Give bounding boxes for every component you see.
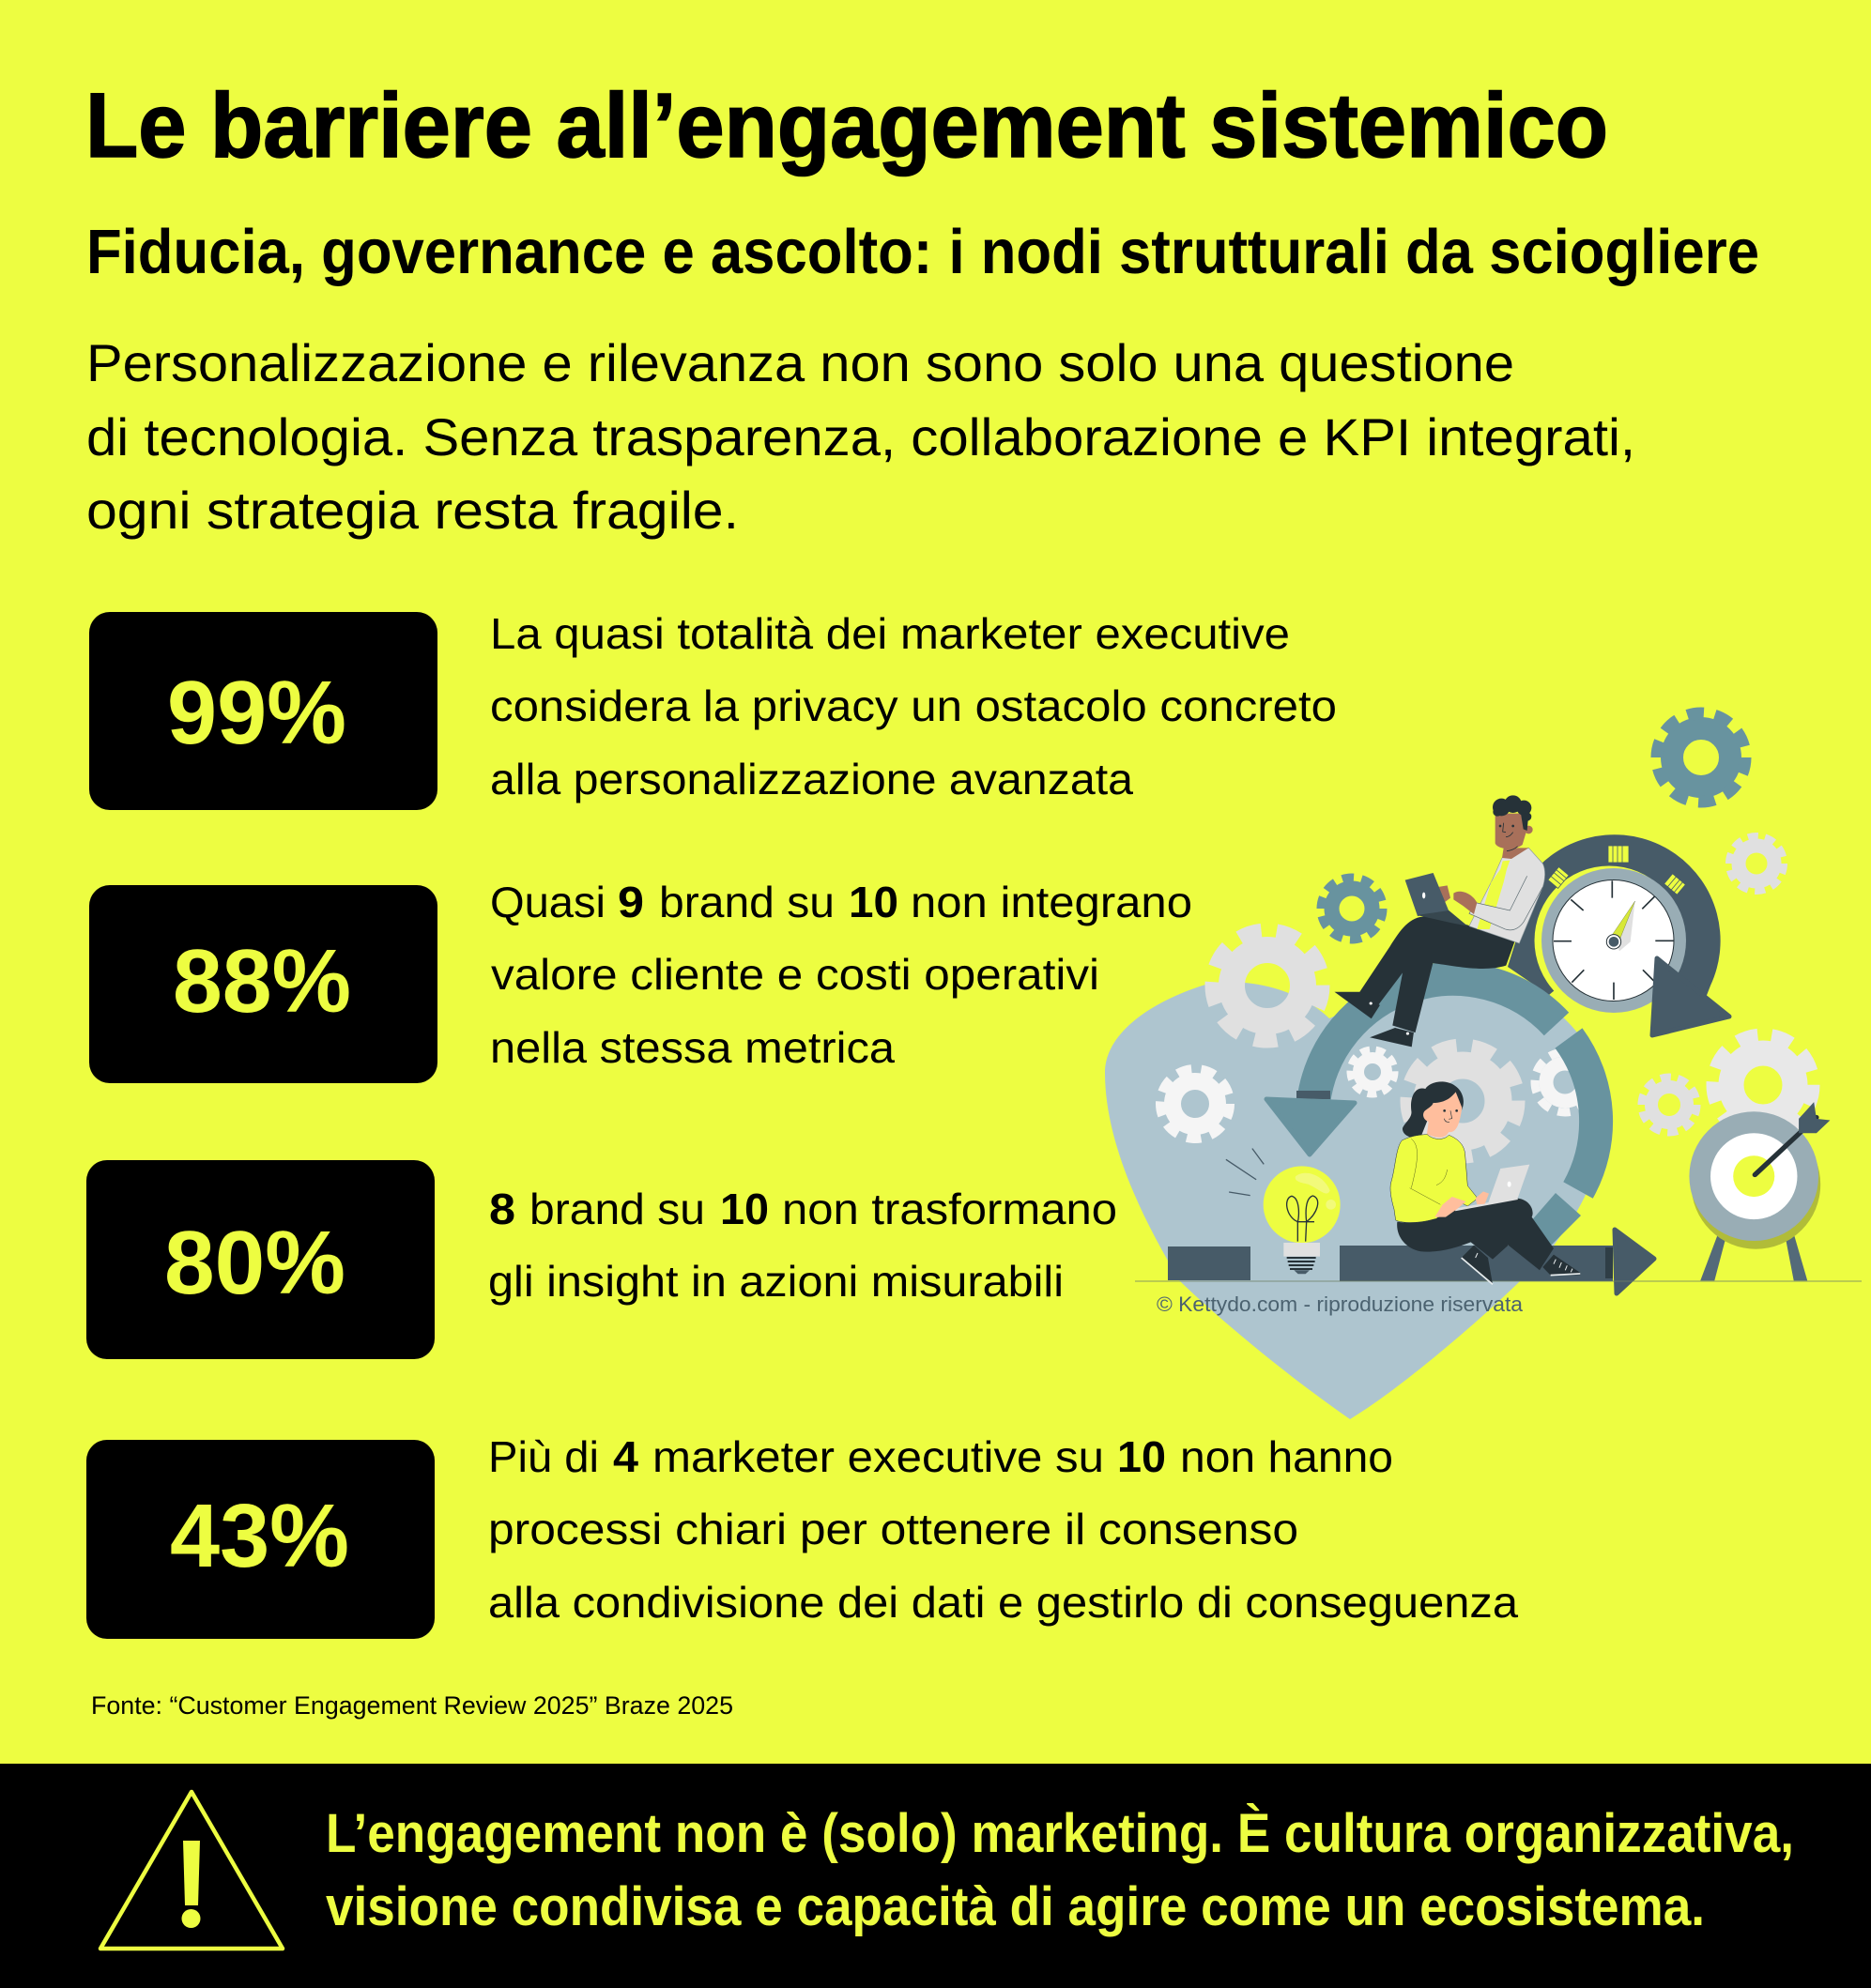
stat number: 88% <box>173 931 351 1032</box>
man sitting with laptop <box>1334 795 1545 1047</box>
gear: small light far right <box>1641 1078 1697 1132</box>
stat text: nella stessa metrica <box>490 1023 895 1072</box>
stat text: non trasformano <box>782 1185 1117 1233</box>
yellow crescent <box>1534 865 1684 1016</box>
gear: right small light <box>1729 836 1784 891</box>
gear: large center <box>1407 1046 1518 1156</box>
heart <box>1105 976 1600 1419</box>
woman sweater <box>1390 1134 1478 1222</box>
gray rim <box>1541 868 1686 1013</box>
circular teal arrow around heart <box>1313 979 1596 1190</box>
intro text block: Personalizzazione e rilevanza non sono solo una questione <box>86 333 1514 392</box>
dark circular band <box>1508 834 1721 1018</box>
stat text: 10 <box>720 1185 769 1233</box>
stat text: non integrano <box>911 878 1192 926</box>
stat number: 43% <box>170 1486 349 1586</box>
stat 4: 43% <box>86 1432 1518 1639</box>
gear: top right teal <box>1657 713 1745 802</box>
gear: white left <box>1160 1069 1230 1139</box>
stat number: 99% <box>167 663 346 763</box>
woman laptop <box>1488 1165 1529 1203</box>
woman face <box>1423 1092 1462 1138</box>
tick marks <box>1554 880 1674 1000</box>
stat box <box>89 612 437 810</box>
woman trousers <box>1397 1199 1554 1270</box>
bottom callout band <box>0 1764 1871 1988</box>
gear: large far right <box>1712 1034 1814 1136</box>
stat text: alla personalizzazione avanzata <box>490 755 1133 803</box>
band background <box>0 1764 1871 1988</box>
target with arrow <box>1689 1102 1830 1280</box>
stat text <box>490 609 1337 803</box>
dark arrow joint <box>1296 1091 1330 1099</box>
needle <box>1606 901 1635 951</box>
crowns <box>1548 846 1685 895</box>
teal arrow lower segment <box>1530 1193 1581 1246</box>
arrowhead dark <box>1652 958 1729 1035</box>
illustration: heart, gears, stopwatch and people <box>1105 713 1862 1419</box>
stat text: 10 <box>849 878 898 926</box>
stat text: 10 <box>1117 1432 1166 1481</box>
stat box <box>86 1440 435 1639</box>
stat text: valore cliente e costi operativi <box>491 950 1099 999</box>
gear: large light left <box>1212 930 1323 1041</box>
white face <box>1553 880 1674 1001</box>
intro text block: ogni strategia resta fragile. <box>86 481 739 540</box>
woman hair <box>1403 1081 1464 1138</box>
woman sitting with laptop <box>1390 1081 1580 1284</box>
man torso and head <box>1405 795 1545 943</box>
stat text: brand su <box>529 1185 705 1233</box>
stat text: La quasi totalità dei marketer executive <box>490 609 1290 658</box>
stat text: Più di <box>488 1432 599 1481</box>
stat text: Quasi <box>490 878 606 926</box>
gear: white right in arc <box>1535 1052 1595 1112</box>
ground line <box>1135 1280 1862 1282</box>
title: Le barriere all’engagement sistemico <box>85 74 1608 176</box>
stat 1: 99% <box>89 609 1337 810</box>
teal arrowhead <box>1266 1099 1355 1155</box>
gear: teal near man <box>1321 878 1383 940</box>
stat text: 9 <box>618 878 644 926</box>
woman shoes <box>1462 1246 1580 1284</box>
stat number: 80% <box>164 1213 345 1313</box>
intro text block <box>86 333 1635 540</box>
horizontal arrow bars <box>1168 1230 1654 1293</box>
woman hands <box>1434 1191 1489 1217</box>
stat text: processi chiari per ottenere il consenso <box>488 1505 1298 1553</box>
gear: white small in arc <box>1350 1049 1395 1094</box>
stat text: 8 <box>489 1185 515 1233</box>
stat 2: 88% <box>89 878 1192 1083</box>
stat text <box>490 878 1192 1072</box>
callout text: visione condivisa e capacità di agire come un ecosistema. <box>326 1876 1705 1937</box>
copyright note: © Kettydo.com - riproduzione riservata <box>1157 1292 1523 1316</box>
stat text <box>488 1432 1518 1627</box>
stat box <box>89 885 437 1083</box>
stat text: gli insight in azioni misurabili <box>488 1257 1064 1306</box>
stat text: considera la privacy un ostacolo concreto <box>490 681 1337 730</box>
bulb rays <box>1226 1149 1264 1196</box>
stopwatch with circular arrow <box>1508 834 1729 1035</box>
stat text: non hanno <box>1180 1432 1393 1481</box>
stat text: marketer executive su <box>652 1432 1104 1481</box>
subtitle: Fiducia, governance e ascolto: i nodi strutturali da sciogliere <box>86 217 1759 287</box>
stat text: brand su <box>659 878 835 926</box>
man legs <box>1334 917 1514 1047</box>
source note: Fonte: “Customer Engagement Review 2025” Braze 2025 <box>91 1691 733 1720</box>
stat box <box>86 1160 435 1359</box>
intro text block: di tecnologia. Senza trasparenza, collaborazione e KPI integrati, <box>86 407 1635 466</box>
stat text: 4 <box>613 1432 638 1481</box>
stat 3: 80% <box>86 1160 1117 1359</box>
stat text: alla condivisione dei dati e gestirlo di conseguenza <box>488 1578 1518 1627</box>
callout text <box>326 1803 1794 1937</box>
light bulb <box>1264 1166 1341 1274</box>
icon: warning triangle <box>100 1792 283 1949</box>
stat text <box>488 1185 1117 1306</box>
